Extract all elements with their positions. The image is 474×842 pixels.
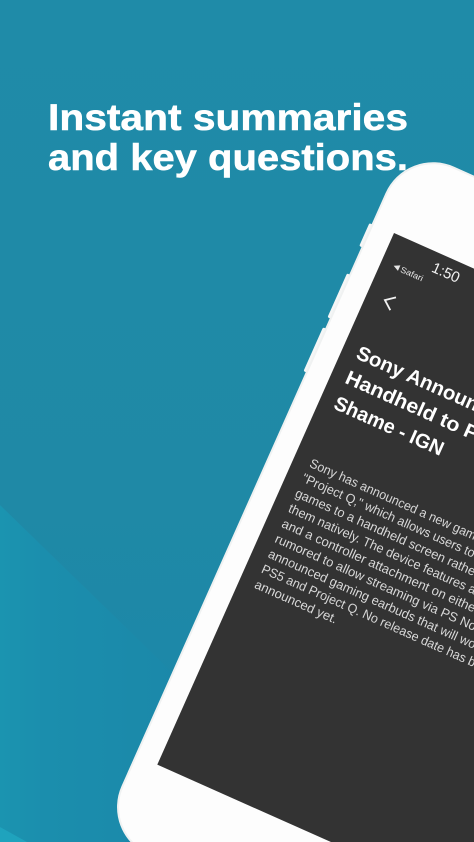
title: Instant summaries (48, 97, 408, 138)
title (48, 97, 408, 178)
back chevron (382, 294, 396, 310)
article headline: Shame - IGN (330, 393, 447, 461)
screen (157, 233, 474, 842)
title: and key questions. (48, 137, 408, 178)
article body: games to a handheld screen rathe (293, 485, 474, 579)
article headline (330, 342, 474, 477)
article body: and a controller attachment on eithe (280, 516, 474, 615)
phone body (102, 147, 474, 842)
status bar (392, 245, 462, 297)
status bar: Safari (399, 264, 425, 283)
phone mockup (98, 145, 474, 842)
side buttons (303, 223, 373, 373)
status bar: 1:50 (429, 259, 462, 287)
article body: rumored to allow streaming via PS No (273, 531, 474, 634)
article body (252, 455, 474, 685)
article body: announced yet. (252, 577, 340, 627)
